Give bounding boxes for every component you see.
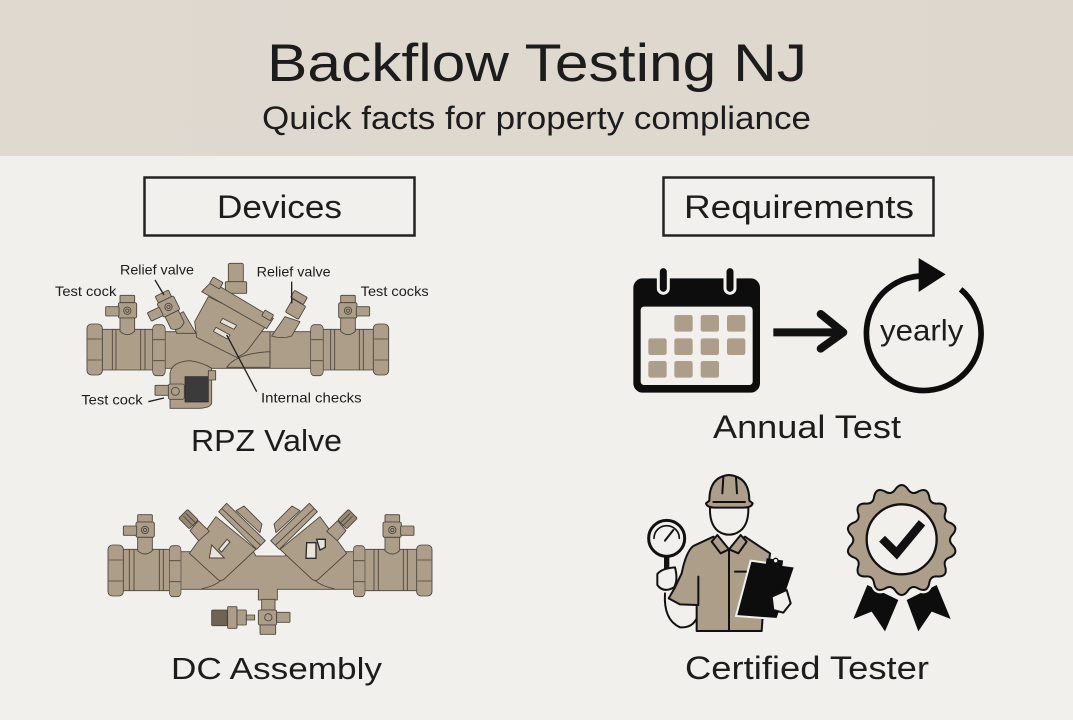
labels and leader lines: Internal checks: [261, 390, 362, 406]
labels and leader lines: Relief valve: [120, 262, 194, 278]
illustration: DC assembly: [108, 503, 432, 634]
heading: Requirements: Requirements: [684, 189, 914, 225]
pipe nuts: [87, 324, 389, 376]
icon: yearly cycle: yearly: [880, 315, 963, 348]
hard hat: [706, 475, 753, 508]
relief valve left: [142, 289, 196, 338]
icon: technician: [649, 475, 795, 631]
relief valve right: [272, 290, 307, 338]
labels and leader lines: Test cock: [81, 392, 144, 408]
heading: Requirements: [664, 178, 934, 236]
title: Backflow Testing NJ: [267, 34, 807, 93]
valve body: [195, 263, 274, 367]
icon: yearly cycle: [866, 258, 981, 391]
illustration: RPZ valve: [55, 262, 429, 408]
left pipe section: [102, 329, 153, 370]
label: Annual Test: Annual Test: [713, 409, 901, 445]
rosette: [848, 485, 955, 595]
arrow: [773, 314, 843, 349]
hand holding gauge: [657, 567, 676, 590]
right pipe section: [364, 549, 417, 591]
hose: [665, 545, 704, 627]
header band: [0, 0, 1073, 156]
top test cocks: [106, 295, 370, 335]
illustration: certified tester: [649, 475, 955, 631]
bottom test cock: [258, 599, 290, 634]
right check valve: [271, 503, 357, 589]
heading: Devices: [144, 178, 414, 236]
collar: [712, 535, 729, 553]
lower test cock and box: [155, 361, 216, 408]
left check valve: [179, 503, 265, 589]
threaded fitting: [212, 607, 255, 628]
label: RPZ Valve: RPZ Valve: [191, 423, 342, 458]
head: [710, 507, 748, 535]
flow arrow: left valve: [209, 539, 230, 558]
label: Certified Tester: Certified Tester: [685, 650, 929, 686]
labels and leader lines: Test cock: [55, 283, 117, 299]
top test cocks: [123, 515, 414, 554]
pipe nuts: [108, 545, 432, 597]
main pipe: [163, 332, 312, 368]
labels and leader lines: Relief valve: [257, 264, 331, 280]
icon: certification badge: [848, 485, 955, 631]
labels and leader lines: [55, 262, 429, 408]
main pipe: [180, 552, 354, 600]
label: DC Assembly: DC Assembly: [171, 651, 383, 686]
rosette halo: [848, 485, 955, 595]
hand holding clipboard: [772, 590, 791, 613]
subtitle: Quick facts for property compliance: [262, 100, 811, 136]
left pipe section: [123, 549, 170, 591]
flow arrow: right valve: [306, 539, 325, 558]
heading: Devices: Devices: [217, 189, 342, 225]
labels and leader lines: Test cocks: [361, 283, 429, 299]
illustration: annual test: [633, 258, 981, 393]
clipboard: [736, 561, 795, 619]
right pipe section: [322, 329, 375, 370]
ribbons: [853, 585, 951, 631]
gauge: [649, 520, 685, 556]
icon: calendar: [633, 267, 760, 393]
body: [669, 537, 770, 631]
